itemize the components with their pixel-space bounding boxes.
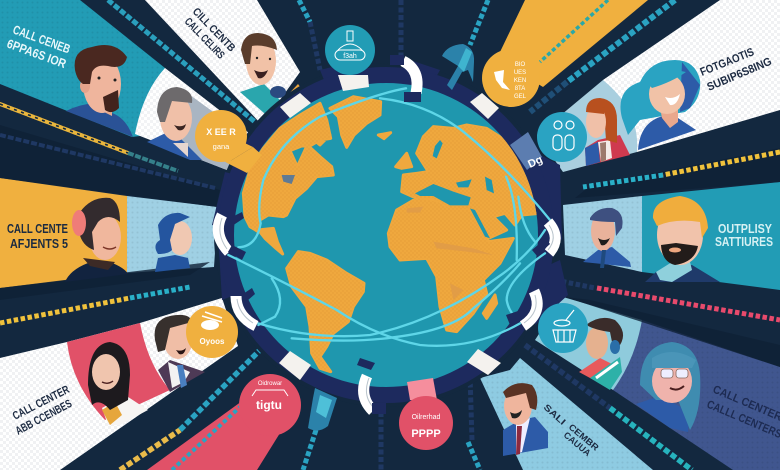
chain: right lower pink bbox=[597, 288, 780, 320]
bulb: pink lower-left: tigtu bbox=[256, 398, 282, 412]
pink arc area bbox=[67, 323, 170, 420]
chain: right upper yellow and teal bbox=[583, 152, 780, 187]
bulb: teal upper-right bbox=[537, 112, 587, 162]
panel: top-right yellow bbox=[500, 0, 648, 87]
person: upper-right teal-haired woman bbox=[620, 60, 700, 150]
dark halo bbox=[214, 63, 558, 407]
text: lower-right label bbox=[705, 384, 780, 441]
bulb: pink lower-left bbox=[239, 374, 301, 436]
inland seas bbox=[282, 140, 494, 238]
bulb: yellow top-right: KEN bbox=[514, 78, 526, 84]
cables bbox=[228, 88, 550, 346]
person: right man with yellow helmet and beard bbox=[645, 196, 720, 282]
text: lower-left label bbox=[11, 384, 74, 438]
handset: left lower bbox=[236, 288, 256, 326]
person: lower-left man in purple suit bbox=[155, 315, 205, 392]
panel: upper-left teal bbox=[0, 0, 165, 137]
person: bottom man in blue suit bbox=[503, 383, 548, 456]
text: upper-left label: 6PPA6S IOR bbox=[5, 37, 68, 71]
bulb: pink lower-left: Oidrowar bbox=[258, 381, 282, 387]
globe bbox=[228, 83, 550, 387]
handset: top bbox=[390, 55, 421, 102]
bulb: left yellow: gana bbox=[213, 142, 230, 151]
text: bottom-right label bbox=[542, 402, 601, 458]
person: right man in blue suit bbox=[583, 208, 631, 268]
text: bottom-right label: SALI bbox=[542, 402, 568, 427]
bulb: yellow top-right bbox=[482, 49, 540, 107]
text: lower-left label: CALL CENTER bbox=[11, 384, 72, 423]
person: upper-right red-haired woman bbox=[585, 98, 630, 166]
chain: lower-left yellow and teal bbox=[120, 348, 262, 470]
panel: left yellow bbox=[0, 178, 218, 288]
person: lower-right woman in saree bbox=[579, 318, 623, 390]
bulb: teal top bbox=[325, 25, 375, 75]
handset: right lower bbox=[506, 291, 537, 326]
bulb: yellow top-right: UES bbox=[514, 70, 526, 76]
chain: pink panel dashes bbox=[172, 407, 240, 470]
text: upper-right label: FOTGAOTIS bbox=[699, 46, 756, 79]
bulb: pink bottom bbox=[399, 396, 453, 450]
handset: right upper bbox=[532, 222, 555, 256]
panel: bottom-left pink bbox=[147, 388, 285, 470]
panel: lower-left white bbox=[0, 298, 238, 470]
bulb: yellow top-right: 8TA bbox=[515, 86, 525, 92]
person: lower-right woman with glasses bbox=[636, 342, 700, 432]
tool icon: bottom brush bbox=[308, 388, 337, 431]
text: left label: CALL CENTE bbox=[7, 221, 68, 236]
handset: left upper bbox=[218, 212, 246, 260]
person: upper-left bearded man bbox=[66, 45, 133, 137]
person: upper-left grey-haired man bbox=[147, 87, 202, 160]
text: bottom-right label: CAUUA bbox=[562, 430, 593, 458]
tool icon: top right brush bbox=[442, 44, 474, 90]
band ends at ring bbox=[212, 60, 568, 325]
person: lower-left woman with dark hair bbox=[88, 342, 148, 425]
text: left label: AFJENTS 5 bbox=[10, 236, 68, 251]
text: top-left label: CILL CENTB bbox=[190, 6, 237, 54]
chain: upper-right teal bbox=[567, 0, 675, 82]
text: upper-left label bbox=[5, 23, 72, 71]
panel: right teal bbox=[563, 182, 780, 290]
bulb: teal lower-right bbox=[538, 303, 588, 353]
dark band highlights bbox=[0, 125, 780, 367]
person: left agent with pink earmuff bbox=[65, 198, 128, 282]
world map land bbox=[243, 97, 539, 372]
chain: bottom centre dashes bbox=[303, 375, 480, 470]
text: upper-left label: CALL CENEB bbox=[11, 23, 72, 56]
chain: top centre dashes bbox=[299, 0, 488, 70]
bulb: pink bottom: PPPP bbox=[411, 428, 441, 440]
chain: top-right yellow-teal bbox=[540, 0, 608, 62]
connector: necks to bulbs: Dg bbox=[526, 154, 545, 171]
handset: bottom bbox=[357, 358, 386, 414]
text: top-left label: CALL CELIRS bbox=[182, 16, 227, 61]
panel: upper-right white bbox=[537, 0, 780, 172]
chain: left lower yellow and teal bbox=[0, 287, 190, 323]
panel: lower-right blue bbox=[535, 297, 780, 470]
upper-right blue-grey arc area bbox=[537, 80, 637, 172]
text: bottom-right label: CEMBR bbox=[567, 422, 601, 453]
globe ring bbox=[218, 67, 554, 403]
person: left woman with blue hair bbox=[155, 213, 192, 272]
person: top man in teal shirt bbox=[240, 33, 304, 120]
text: upper-right label: SUBIP6S8ING bbox=[705, 56, 774, 94]
panel: top-left white bbox=[145, 0, 300, 125]
text: right label bbox=[715, 221, 773, 249]
connector: necks to bulbs bbox=[208, 75, 545, 400]
text: lower-left label: ABB CCENBES bbox=[14, 398, 74, 438]
panel: upper-left inner white and grey bbox=[135, 68, 258, 172]
chain: lower-right teal bbox=[525, 345, 692, 470]
chain: upper-left gold bbox=[0, 104, 215, 188]
bulb: teal top: f3ah bbox=[343, 53, 357, 60]
bulb: yellow top-right: GEL bbox=[514, 94, 527, 100]
bulb: yellow lower-left bbox=[186, 306, 238, 358]
bulb: yellow lower-left: Oyoos bbox=[200, 337, 225, 346]
panel: bottom-right light blue bbox=[480, 358, 653, 470]
bulb: yellow top-right: BIO bbox=[515, 62, 525, 68]
bulb: pink bottom: Oilrerhad bbox=[412, 414, 440, 421]
chain: top-left teal bbox=[108, 0, 255, 122]
text: left label bbox=[7, 221, 68, 251]
bulb: left yellow bbox=[195, 110, 247, 162]
bulb: left yellow: X EE R bbox=[206, 127, 236, 137]
